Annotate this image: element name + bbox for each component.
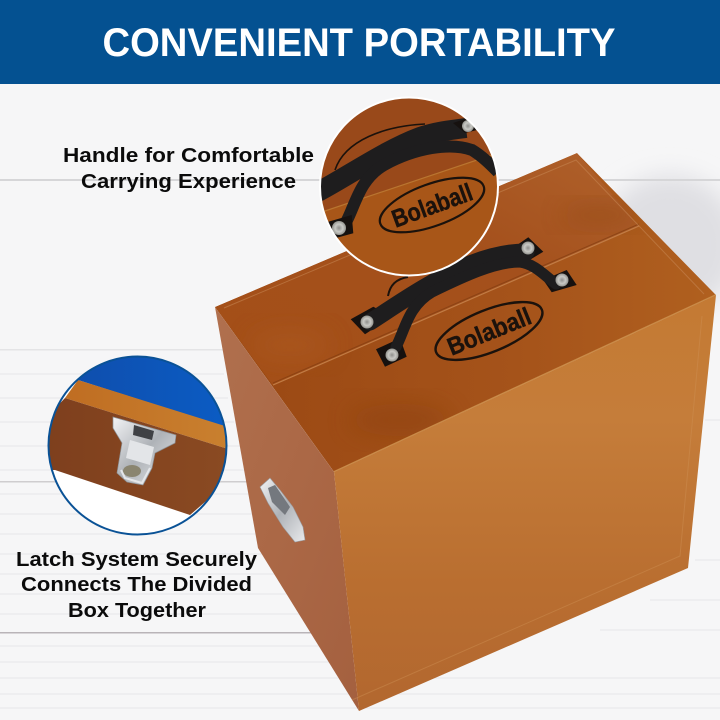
Bolaball logo on box: Bolaball [443, 302, 535, 361]
box left side face [215, 307, 359, 711]
box front face [334, 295, 716, 711]
callout: handle text: Carrying Experience [81, 171, 296, 193]
callout: handle text [63, 145, 314, 193]
handle [351, 237, 577, 367]
title: CONVENIENT PORTABILITY [102, 21, 616, 65]
handle tabs [351, 307, 392, 334]
back logo peeking out [388, 277, 408, 296]
inset blue felt [78, 358, 224, 426]
inset tabs [328, 215, 353, 238]
circle inset: latch close-up [44, 354, 230, 538]
header banner [0, 0, 720, 84]
inset rivets [332, 221, 346, 235]
inset latch [113, 417, 176, 485]
wooden box [215, 153, 716, 711]
side latch [260, 478, 305, 542]
callout: latch text: Connects The Divided [21, 574, 252, 596]
Bolaball logo on box [428, 290, 550, 372]
circle inset: handle close-up [316, 90, 500, 279]
handle straps [370, 252, 556, 347]
inset wood rim [65, 380, 228, 449]
inset upper logo arc [335, 124, 425, 170]
box top face [215, 153, 716, 472]
callout: latch text [16, 549, 258, 622]
inset straps [316, 128, 498, 226]
rivets [360, 316, 374, 328]
callout: latch text: Latch System Securely [16, 549, 258, 571]
inset Bolaball logo: Bolaball [388, 178, 477, 233]
inset wood front [44, 398, 228, 515]
callout: latch text: Box Together [68, 600, 206, 622]
callout: handle text: Handle for Comfortable [63, 145, 314, 167]
